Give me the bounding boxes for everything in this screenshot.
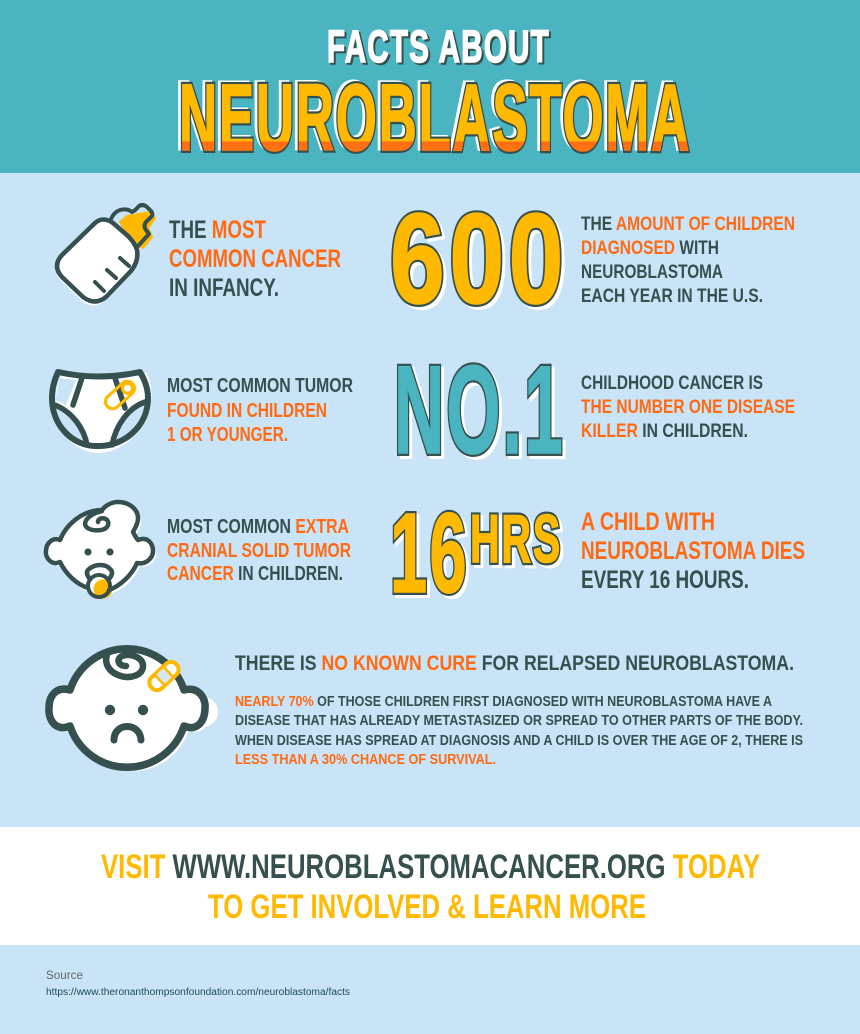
text: amount of children: EACH YEAR IN THE U.S. — [581, 285, 763, 307]
source: https://www.theronanthompsonfoundation.com/neuroblastoma/facts — [46, 987, 350, 998]
icon: baby bottle — [56, 205, 155, 306]
stat: 16 hrs: HRS — [470, 501, 562, 577]
header banner — [0, 0, 860, 173]
stat: No.1: NO.1 — [397, 344, 568, 483]
text: survival paragraph: LESS THAN A 30% CHANCE OF SURVIVAL. — [235, 752, 496, 768]
call to action band: TO GET INVOLVED & LEARN MORE — [208, 888, 646, 926]
source — [46, 968, 350, 998]
text: dies every 16 hours — [581, 508, 805, 594]
text: no known cure: THERE IS NO KNOWN CURE FOR RELAPSED NEUROBLASTOMA. — [235, 652, 794, 675]
text: most common tumor: FOUND IN CHILDREN — [167, 400, 327, 422]
stat: 16 hrs: HRS — [470, 501, 562, 577]
text: extra cranial solid tumor — [167, 516, 351, 585]
text: amount of children: NEUROBLASTOMA — [581, 261, 723, 283]
icon: sad baby with bandage — [49, 649, 218, 771]
text: number one disease killer: THE NUMBER ONE DISEASE — [581, 396, 795, 418]
stat: No.1: NO.1 — [394, 341, 565, 480]
icon: diaper with safety pin — [52, 372, 151, 453]
stat: 600: 600 — [390, 188, 568, 331]
text: extra cranial solid tumor: CANCER IN CHILDREN. — [167, 563, 343, 585]
text: survival paragraph — [235, 694, 803, 768]
text: number one disease killer: KILLER IN CHILDREN. — [581, 420, 748, 442]
text: number one disease killer: CHILDHOOD CANCER IS — [581, 372, 763, 394]
text: number one disease killer — [581, 372, 795, 442]
title: facts about: FACTS ABOUT — [327, 21, 550, 72]
stat: 600: 600 — [390, 188, 568, 331]
text: most common tumor: MOST COMMON TUMOR — [167, 375, 353, 397]
text: amount of children: DIAGNOSED WITH — [581, 237, 719, 259]
text: most common cancer — [169, 216, 341, 302]
bandage — [146, 659, 182, 693]
call to action band — [0, 827, 860, 945]
stat: No.1: NO.1 — [394, 341, 565, 480]
text: most common cancer: COMMON CANCER — [169, 245, 341, 273]
call to action band: VISIT WWW.NEUROBLASTOMACANCER.ORG TODAY — [101, 848, 760, 886]
text: dies every 16 hours: EVERY 16 HOURS. — [581, 566, 749, 594]
stat: 16 hrs: 16 — [390, 490, 469, 616]
text: most common tumor — [167, 375, 353, 446]
text: most common cancer: THE MOST — [169, 216, 266, 244]
stat: 16 hrs: 16 — [390, 490, 469, 616]
text: amount of children — [581, 213, 795, 307]
stat: 600: 600 — [393, 191, 571, 334]
text: survival paragraph: NEARLY 70% OF THOSE CHILDREN FIRST DIAGNOSED WITH NEUROBLASTOMA HAVE A — [235, 694, 772, 710]
text: extra cranial solid tumor: CRANIAL SOLID TUMOR — [167, 540, 351, 562]
text: most common tumor: 1 OR YOUNGER. — [167, 424, 288, 446]
stat: No.1 — [394, 341, 568, 483]
text: extra cranial solid tumor: MOST COMMON EXTRA — [167, 516, 349, 538]
text: dies every 16 hours: A CHILD WITH — [581, 508, 715, 536]
text: most common cancer: IN INFANCY. — [169, 274, 279, 302]
text: amount of children: THE AMOUNT OF CHILDREN — [581, 213, 795, 235]
stat: 16 hrs: 16 — [393, 493, 472, 619]
stat: 16 hrs: HRS — [473, 504, 565, 580]
safety pin — [103, 378, 137, 412]
icon: baby with pacifier — [46, 502, 156, 598]
source: Source — [46, 968, 83, 982]
